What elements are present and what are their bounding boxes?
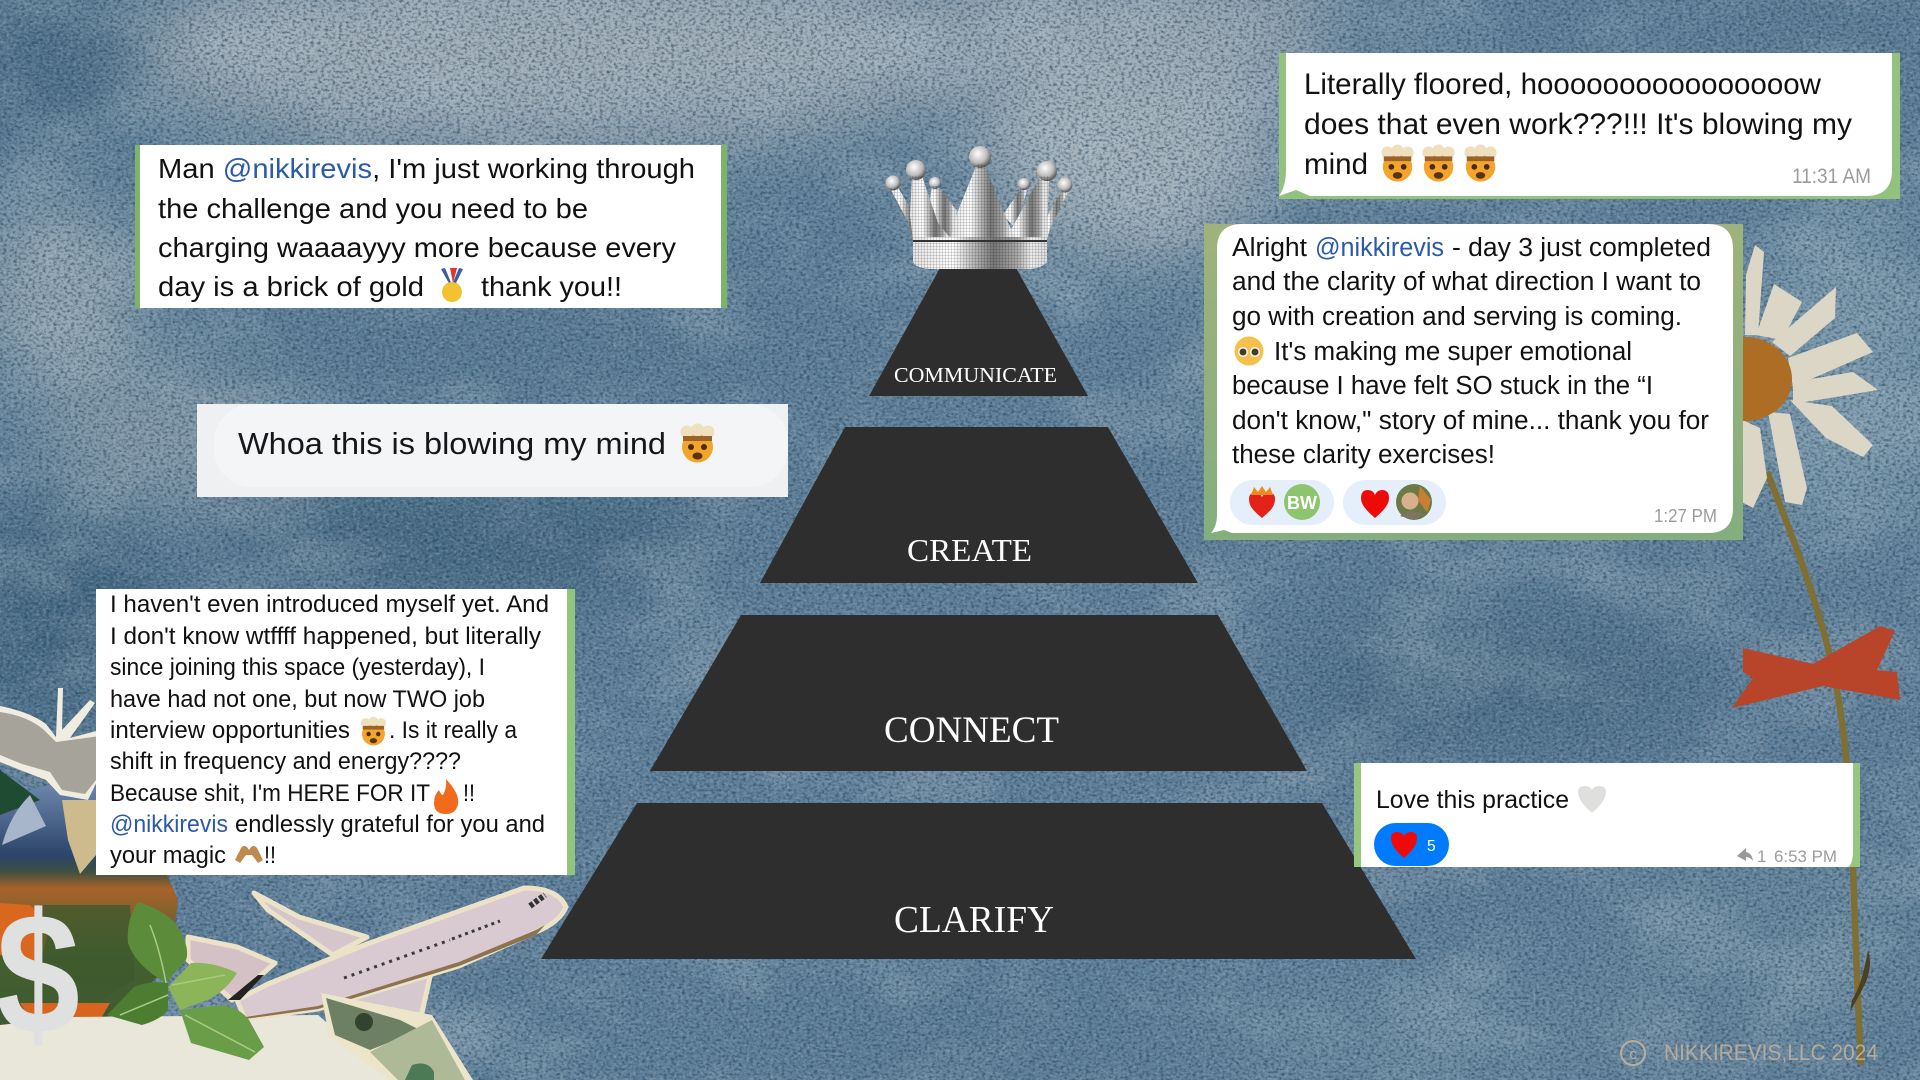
reply count and time [1737, 847, 1837, 866]
tier: clarify: CLARIFY [894, 899, 1054, 941]
reply count and time: 6:53 PM [1774, 847, 1837, 866]
icon: white heart emoji [1578, 786, 1606, 813]
message panel: job interview opportunities: !! [264, 842, 276, 869]
message panel: Man @nikkirevis: the challenge and you need to be [158, 193, 588, 224]
message panel: Alright day 3: go with creation and serving is coming. [1232, 303, 1682, 331]
flower [1698, 245, 1878, 1065]
icon: exploding head emoji [1464, 145, 1497, 182]
message panel: Whoa this is blowing my mind [197, 404, 788, 497]
tier: create [760, 427, 1198, 583]
copyright footer: NIKKIREVIS,LLC 2024 [1664, 1040, 1878, 1065]
message panel: job interview opportunities [96, 589, 575, 875]
message panel: Alright day 3: - day 3 just completed [1452, 234, 1711, 262]
reaction pill: heart, avatar [1343, 480, 1446, 525]
message panel: job interview opportunities: endlessly grateful for you and [235, 811, 545, 838]
tier: clarify [541, 803, 1416, 959]
collage: sand [0, 1015, 394, 1080]
message panel: job interview opportunities: have had not one, but now TWO job [110, 686, 485, 713]
message panel: Alright day 3: Alright [1232, 234, 1307, 262]
message panel: job interview opportunities: since joining this space (yesterday), I [110, 654, 485, 681]
collage: dollar bill [321, 993, 473, 1080]
message panel: job interview opportunities: your magic [110, 842, 226, 869]
icon: medal [441, 268, 463, 302]
red ribbon bow [1732, 626, 1900, 708]
message panel: Man @nikkirevis [135, 145, 727, 308]
message panel: Alright day 3: these clarity exercises! [1232, 441, 1495, 469]
message panel: Literally floored: Literally floored, hoooooooooooooooow [1304, 68, 1821, 101]
tier: create: CREATE [907, 532, 1032, 568]
icon: fire emoji [434, 779, 458, 814]
collage: airplane [188, 888, 566, 1022]
message panel: Alright day 3: 1:27 PM [1654, 506, 1717, 526]
message panel: Whoa this is blowing my mind: Whoa this is blowing my mind [238, 426, 666, 461]
collage: butterfly [0, 688, 100, 800]
reaction pill: heart 5: 5 [1427, 838, 1436, 855]
message panel: Alright day 3: and the clarity of what direction I want to [1232, 268, 1701, 296]
message panel: job interview opportunities: interview opportunities [110, 717, 350, 744]
tier: connect: CONNECT [884, 710, 1059, 751]
reaction pill: fire heart, BW [1230, 480, 1334, 525]
message panel: job interview opportunities: Because shit, I'm HERE FOR IT [110, 780, 430, 807]
copyright footer: c [1629, 1046, 1637, 1063]
reaction pill: fire heart, BW: BW [1287, 493, 1317, 513]
message panel: Alright day 3 [1204, 224, 1743, 540]
message panel: Alright day 3: It's making me super emotional [1274, 338, 1632, 366]
tier: communicate: COMMUNICATE [894, 363, 1057, 387]
icon: exploding head emoji [680, 424, 714, 462]
icon: exploding head emoji [1381, 145, 1414, 182]
message panel: Literally floored: 11:31 AM [1792, 165, 1871, 188]
icon: exploding head emoji [361, 717, 386, 745]
petals [1738, 245, 1878, 508]
message panel: Literally floored: does that even work???!!! It's blowing my [1304, 108, 1852, 141]
tier: communicate [869, 268, 1088, 396]
message panel: job interview opportunities: @nikkirevis [110, 811, 228, 838]
icon: pleading face emoji [1234, 336, 1264, 366]
message panel: job interview opportunities: !! [463, 780, 475, 807]
icon: heart hands emoji [235, 846, 263, 863]
message panel: Alright day 3: don't know," story of mine... thank you for [1232, 407, 1710, 435]
tier: connect [650, 615, 1307, 771]
flower disk [1698, 337, 1792, 421]
message panel: Literally floored [1279, 53, 1900, 199]
message panel: Alright day 3: because I have felt SO stuck in the “I [1232, 372, 1653, 400]
message panel: job interview opportunities: I haven't even introduced myself yet. And [110, 591, 549, 618]
icon: exploding head emoji [1422, 145, 1455, 182]
message panel: Man @nikkirevis: charging waaaayyy more because every [158, 232, 676, 263]
message panel: job interview opportunities: I don't know wtffff happened, but literally [110, 623, 542, 650]
message panel: Alright day 3: @nikkirevis [1315, 234, 1444, 262]
message panel: Love this practice: Love this practice [1376, 786, 1569, 814]
message panel: Man @nikkirevis: thank you!! [481, 271, 622, 302]
reply count and time: 1 [1757, 847, 1766, 866]
message panel: Literally floored: mind [1304, 148, 1368, 181]
pyramid [541, 268, 1416, 959]
reaction pill: heart 5 [1374, 823, 1449, 866]
collage: earth globe [0, 770, 178, 1030]
message panel: job interview opportunities: shift in frequency and energy???? [110, 748, 461, 775]
icon: crown [886, 146, 1072, 269]
message panel: job interview opportunities: . Is it really a [389, 717, 517, 744]
message panel: Man @nikkirevis: day is a brick of gold [158, 271, 424, 302]
message panel: Love this practice [1354, 763, 1860, 867]
collage: basil leaves [107, 902, 264, 1060]
message panel: Man @nikkirevis: Man @nikkirevis, I'm just working through [158, 153, 695, 184]
